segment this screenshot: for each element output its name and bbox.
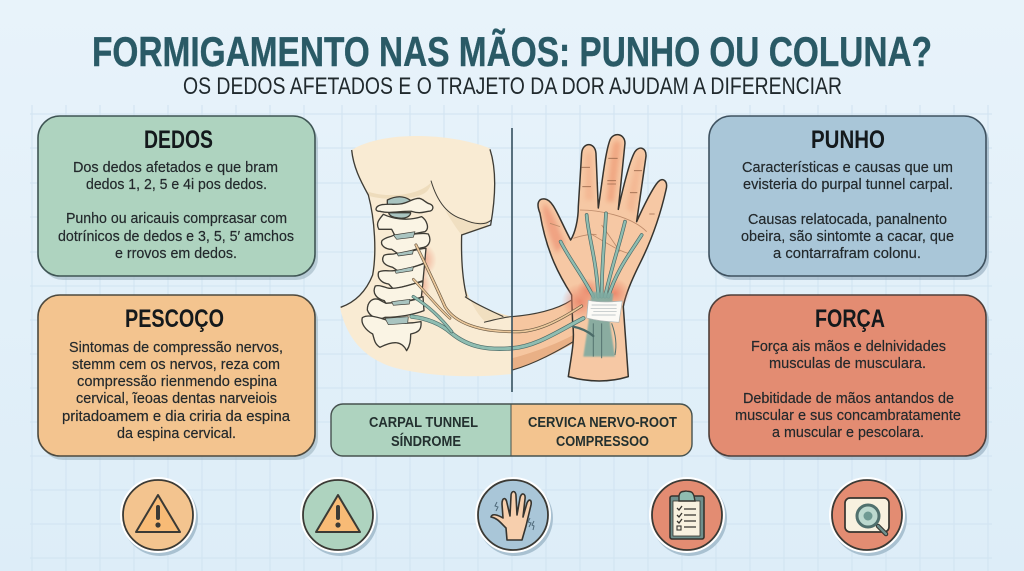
text: punho: a contarrafram colonu. bbox=[773, 246, 921, 262]
illustration: neck spine and hand bbox=[340, 135, 667, 381]
text: forca bbox=[735, 339, 961, 441]
heading: forca: FORÇA bbox=[815, 305, 885, 333]
pain glow: spine bbox=[400, 242, 437, 302]
subtitle: OS DEDOS AFETADOS E O TRAJETO DA DOR AJUDAM A DIFERENCIAR bbox=[183, 73, 842, 100]
label: carpal tunnel bbox=[369, 415, 478, 450]
heading: pescoco: PESCOÇO bbox=[125, 305, 224, 333]
arm bbox=[512, 300, 588, 370]
text: punho: obeira, são sintomte a cacar, que bbox=[741, 229, 954, 245]
tendons and nerves bbox=[561, 213, 642, 297]
text: dedos: dotrínicos de dedos e 3, 5, 5′ amchos bbox=[58, 229, 294, 245]
text: pescoco bbox=[62, 340, 291, 442]
text: pescoco: stemm cem os nervos, reza com bbox=[72, 357, 280, 373]
label: cervical compression bbox=[528, 415, 677, 450]
panel: forca bbox=[709, 295, 989, 460]
text: punho: Características e causas que um bbox=[742, 160, 953, 176]
icon: warning orange bbox=[120, 477, 198, 556]
neck and shoulder bbox=[340, 136, 512, 376]
text: punho: evisteria do purpal tunnel carpal. bbox=[743, 177, 953, 193]
icon: tingling hand bbox=[475, 477, 553, 556]
nerve path bbox=[412, 245, 593, 349]
text: forca: a muscular e pescolara. bbox=[772, 425, 924, 441]
heading: dedos: DEDOS bbox=[144, 126, 213, 154]
divider line bbox=[511, 128, 513, 392]
label: carpal tunnel: CARPAL TUNNEL bbox=[369, 415, 478, 431]
text: pescoco: pritadoamem e dia criria da espina bbox=[62, 409, 291, 425]
hand bbox=[538, 135, 667, 381]
text: punho bbox=[741, 160, 954, 262]
text: dedos bbox=[58, 160, 294, 262]
label bar bbox=[331, 404, 692, 456]
panel: punho bbox=[709, 116, 989, 280]
icon: magnifier on scan bbox=[829, 477, 907, 556]
text: pescoco: compressão rienmendo espina bbox=[77, 374, 278, 390]
text: forca: muscular e sus concambratamente bbox=[735, 408, 961, 424]
panel: dedos bbox=[38, 116, 318, 280]
text: dedos: Punho ou aricauis comprεasar com bbox=[66, 211, 287, 227]
text: dedos: Dos dedos afetados e que bram bbox=[73, 160, 278, 176]
icon: warning green bbox=[300, 477, 378, 556]
label: cervical compression: COMPRESSOO bbox=[556, 434, 649, 450]
label: carpal tunnel: SÍNDROME bbox=[391, 433, 461, 450]
text: pescoco: cervical, ĩeoas dentas narveiois bbox=[76, 391, 277, 407]
text: forca: Debitidade de mãos antandos de bbox=[743, 391, 954, 407]
text: forca: Força ais mãos e delnividades bbox=[751, 339, 946, 355]
text: pescoco: Sintomas de compressão nervos, bbox=[69, 340, 283, 356]
text: punho: Causas relatocada, panalnento bbox=[748, 212, 947, 228]
text: forca: musculas de musculara. bbox=[769, 356, 926, 372]
panel: pescoco bbox=[38, 295, 318, 460]
text: dedos: dedos 1, 2, 5 e 4i pos dedos. bbox=[86, 177, 267, 193]
label: cervical compression: CERVICA NERVO-ROOT bbox=[528, 415, 677, 431]
wrist band bbox=[587, 300, 622, 322]
icon: clipboard bbox=[649, 477, 727, 556]
cervical spine bbox=[362, 197, 433, 351]
text: dedos: e rrovos em dedos. bbox=[115, 246, 237, 262]
heading: punho: PUNHO bbox=[811, 126, 885, 154]
text: pescoco: da espina cervical. bbox=[117, 426, 236, 442]
